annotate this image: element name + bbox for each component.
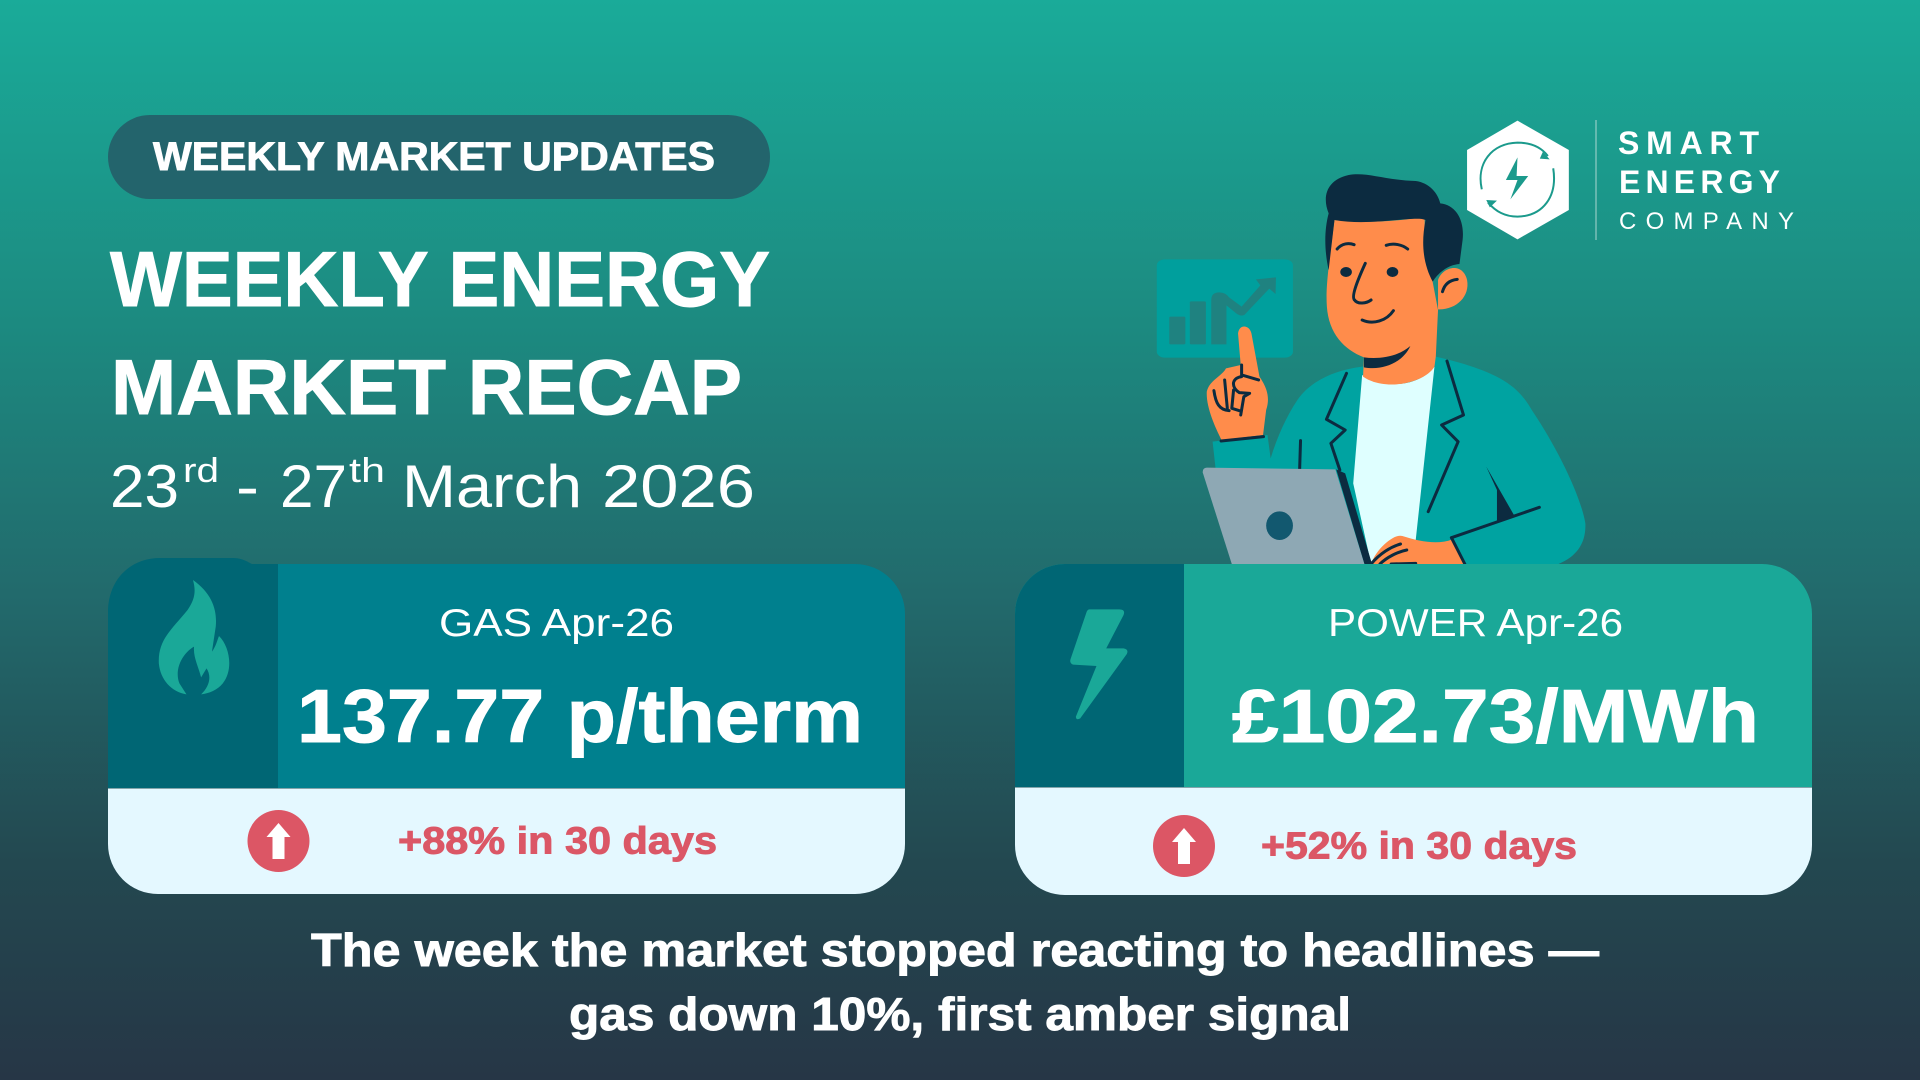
date range: March	[402, 453, 582, 520]
gas header	[108, 564, 905, 788]
jacket details	[1300, 361, 1539, 538]
date range: 27	[280, 453, 347, 520]
icon: up arrow	[1153, 815, 1215, 877]
gas price value: 137.77 p/therm	[297, 674, 863, 758]
gas change strip	[108, 788, 905, 894]
tag pill: weekly market updates	[108, 115, 770, 199]
title	[110, 235, 770, 431]
logo: smart energy company	[1467, 120, 1794, 240]
face	[1327, 217, 1438, 384]
date range	[110, 452, 755, 520]
facial features	[1337, 244, 1457, 322]
date range: th	[349, 452, 385, 490]
date range: rd	[183, 452, 219, 490]
power label: POWER Apr-26	[1328, 602, 1623, 645]
power price value: £102.73/MWh	[1232, 674, 1759, 758]
logo: smart energy company: SMART	[1618, 125, 1759, 161]
icon: flame	[159, 580, 229, 694]
logo icon: hexagon with bolt	[1467, 121, 1569, 239]
hair	[1325, 174, 1463, 282]
icon: up arrow	[248, 810, 310, 872]
gas label: GAS Apr-26	[439, 602, 674, 645]
typing hand	[1371, 536, 1465, 564]
date range: 23	[110, 453, 179, 520]
icon: lightning bolt	[1070, 609, 1127, 719]
panel: gas price	[108, 558, 905, 894]
gas icon tab	[108, 558, 278, 788]
laptop	[1203, 468, 1372, 564]
logo: smart energy company: COMPANY	[1619, 208, 1794, 235]
power change text: +52% in 30 days	[1261, 826, 1577, 868]
power icon tab	[1015, 564, 1184, 787]
title: WEEKLY ENERGY	[110, 235, 770, 323]
date range: 2026	[602, 453, 755, 520]
date range: -	[236, 453, 259, 520]
tag pill: weekly market updates: WEEKLY MARKET UPDATES	[153, 135, 715, 179]
summary statement: gas down 10%, first amber signal	[569, 988, 1351, 1040]
panel: power price	[1015, 564, 1812, 895]
summary statement	[311, 924, 1599, 1040]
logo: smart energy company: ENERGY	[1619, 164, 1780, 200]
jacket	[1213, 357, 1585, 564]
summary statement: The week the market stopped reacting to headlines —	[311, 924, 1599, 976]
power header	[1015, 564, 1812, 787]
beard shadow	[1364, 346, 1410, 368]
gas change text: +88% in 30 days	[398, 820, 717, 862]
chart card	[1157, 259, 1293, 358]
title: MARKET RECAP	[111, 343, 742, 431]
ear	[1438, 268, 1467, 309]
raised hand	[1207, 326, 1268, 441]
illustration: man pointing at chart with laptop	[1157, 174, 1585, 564]
shirt	[1353, 367, 1434, 564]
power change strip	[1015, 788, 1812, 895]
